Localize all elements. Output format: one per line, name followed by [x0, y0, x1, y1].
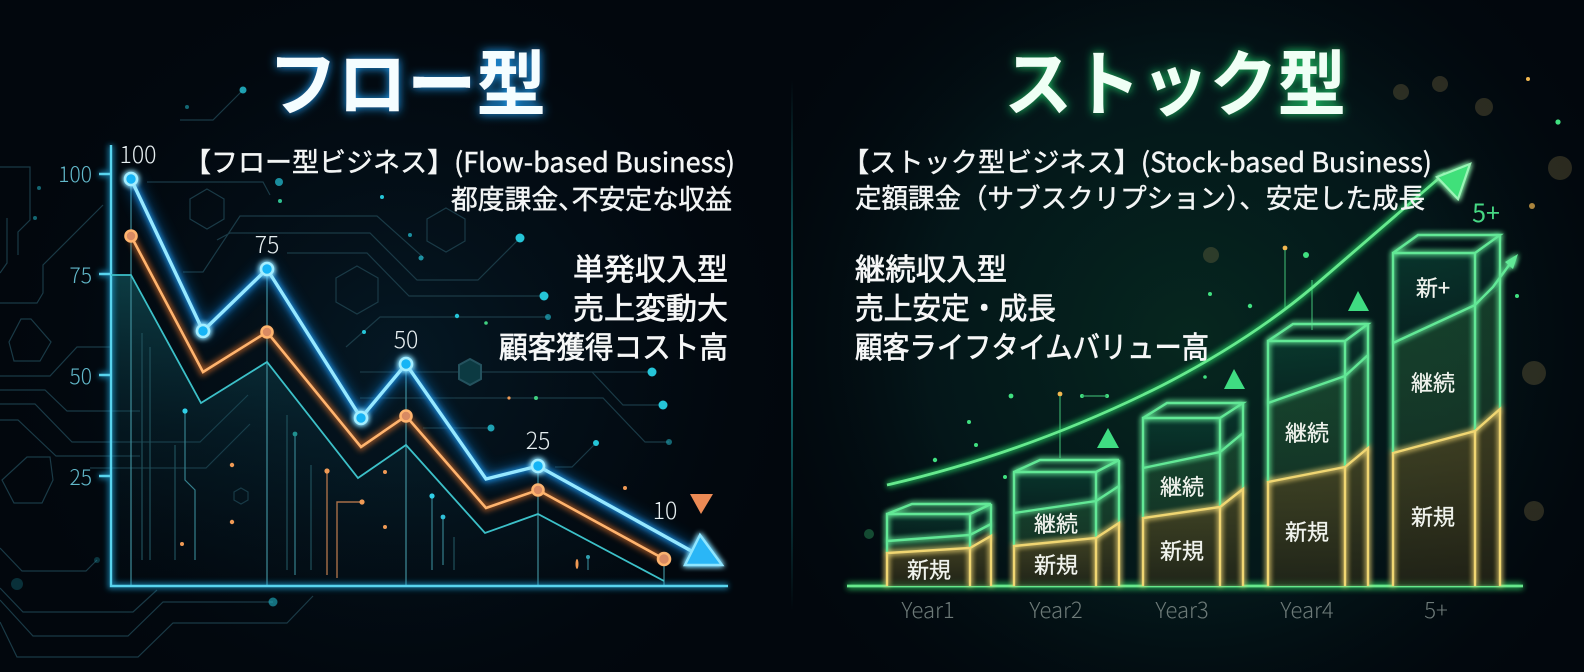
bar: year 5+ — [1393, 235, 1518, 586]
icon: orange down triangle — [690, 494, 713, 514]
axis labels: 25 — [70, 462, 92, 492]
axis labels: 50 — [70, 361, 92, 391]
panel: stock business chart — [847, 76, 1572, 625]
text block: flow points: 顧客獲得コスト高 — [499, 323, 728, 367]
year labels: 5+ — [1424, 593, 1448, 625]
year labels: Year3 — [1155, 593, 1209, 625]
value labels: 75 — [255, 226, 279, 260]
bar: year 1 — [887, 504, 991, 586]
year labels: Year2 — [1029, 593, 1083, 625]
bar labels: 新規 — [1160, 534, 1204, 566]
bar labels: 新規 — [907, 553, 951, 585]
baseline — [847, 582, 1523, 590]
label: 5+ top: 5+ — [1472, 194, 1500, 230]
circuit background — [0, 86, 672, 657]
text block: flow heading: 【フロー型ビジネス】(Flow-based Business) — [184, 141, 735, 180]
text block: stock points: 顧客ライフタイムバリュー高 — [855, 323, 1209, 367]
axis labels — [58, 159, 92, 492]
year labels: Year1 — [901, 593, 955, 625]
axis labels: 75 — [70, 260, 92, 290]
text block: flow heading: 都度課金、不安定な収益 — [451, 178, 732, 217]
bar labels: 新+ — [1416, 271, 1450, 303]
year labels — [901, 593, 1448, 625]
text block: stock heading: 【ストック型ビジネス】(Stock-based Business) — [842, 141, 1432, 180]
bar labels: 継続 — [1034, 507, 1078, 539]
value labels: 10 — [653, 492, 677, 526]
year labels: Year4 — [1280, 593, 1334, 625]
panel: flow business chart — [0, 86, 728, 657]
axis labels: 100 — [58, 159, 92, 189]
orange line — [126, 230, 670, 565]
title: flow: フロー型 — [268, 26, 546, 131]
text block: stock points: 売上安定・成長 — [855, 284, 1056, 328]
text block: stock points: 継続収入型 — [855, 245, 1007, 289]
icons: up triangles — [1097, 291, 1369, 448]
inner signal lines — [131, 179, 664, 586]
value labels — [120, 136, 677, 526]
text block: stock heading: 定額課金（サブスクリプション）、安定した成長 — [855, 177, 1425, 216]
bar labels: 継続 — [1411, 366, 1455, 398]
text block: flow points: 単発収入型 — [573, 245, 728, 289]
text block: flow points — [499, 245, 728, 367]
growth arrow — [887, 164, 1470, 485]
bar labels: 新規 — [1285, 515, 1329, 547]
bar labels: 新規 — [1411, 500, 1455, 532]
bar labels: 新規 — [1034, 548, 1078, 580]
icon: blue arrowhead — [685, 535, 722, 565]
teal area — [111, 275, 664, 586]
bar: year 3 — [1143, 403, 1243, 586]
value labels: 100 — [120, 136, 156, 170]
text block: stock points — [855, 245, 1209, 367]
text block: stock heading — [842, 141, 1432, 216]
value labels: 25 — [526, 422, 550, 456]
bar labels — [907, 271, 1455, 585]
text block: flow heading — [184, 141, 735, 217]
axes — [99, 145, 728, 586]
bar: year 2 — [1014, 460, 1119, 586]
bar: year 4 — [1268, 324, 1368, 586]
text block: flow points: 売上変動大 — [573, 284, 728, 328]
teal line — [111, 275, 664, 581]
bar labels: 継続 — [1285, 416, 1329, 448]
center divider — [791, 80, 793, 610]
value labels: 50 — [394, 321, 418, 355]
bar labels: 継続 — [1160, 470, 1204, 502]
particles — [864, 76, 1572, 539]
title: stock: ストック型 — [1004, 26, 1346, 131]
blue line — [125, 173, 695, 553]
